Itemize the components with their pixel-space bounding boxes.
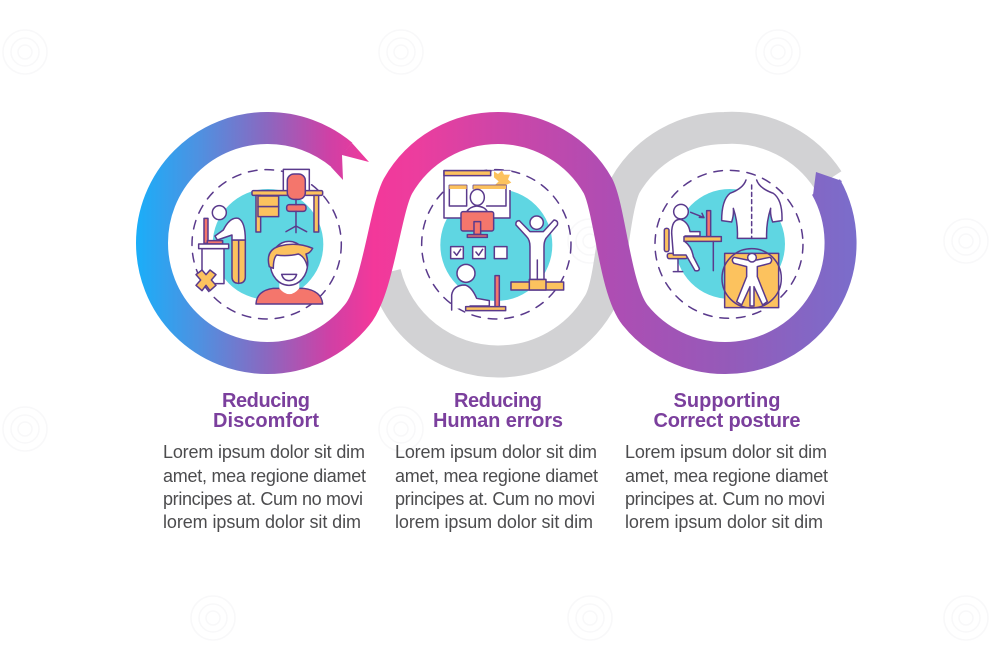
body text: lorem ipsum dolor sit dim [625, 512, 823, 532]
office desk and chair [252, 169, 323, 233]
grey ribbon behind the timeline [385, 128, 828, 362]
body text: amet, mea regione diamet [163, 466, 366, 486]
icon: correct posture [655, 170, 803, 318]
body text: Lorem ipsum dolor sit dim [163, 442, 365, 462]
checkboxes [451, 247, 507, 259]
back torso [722, 180, 782, 238]
teal blob [213, 189, 323, 300]
software window with gear [444, 171, 511, 218]
vitruvian man [722, 249, 781, 308]
body text: lorem ipsum dolor sit dim [163, 512, 361, 532]
gradient ribbon with arrow ends [152, 128, 842, 358]
body text: lorem ipsum dolor sit dim [395, 512, 593, 532]
body text: principes at. Cum no movi [163, 489, 363, 509]
body text: amet, mea regione diamet [395, 466, 598, 486]
monitor [461, 212, 494, 237]
seated person at laptop [452, 264, 506, 311]
arrow tail [813, 172, 842, 199]
body text: Lorem ipsum dolor sit dim [625, 442, 827, 462]
heading: Correct posture [654, 410, 800, 432]
teal blob [440, 189, 552, 301]
icon: discomfort [192, 169, 341, 319]
heading: Reducing [454, 390, 542, 412]
dashed circle [422, 170, 571, 319]
heading: Discomfort [213, 410, 319, 432]
column 3: Supporting Correct posture [625, 390, 828, 532]
seated upright person [664, 204, 721, 272]
body text: principes at. Cum no movi [625, 489, 825, 509]
body text: principes at. Cum no movi [395, 489, 595, 509]
body text: amet, mea regione diamet [625, 466, 828, 486]
dashed circle [192, 170, 341, 319]
dashed circle [655, 170, 803, 318]
smiling man [256, 241, 323, 304]
heading: Supporting [674, 390, 780, 412]
cheering person on platform [511, 216, 564, 290]
heading: Human errors [433, 410, 563, 432]
icon: human errors [422, 170, 571, 319]
body text: Lorem ipsum dolor sit dim [395, 442, 597, 462]
heading: Reducing [222, 390, 310, 412]
arrow head [331, 143, 369, 180]
teal blob [675, 189, 785, 299]
column 2: Reducing Human errors [395, 390, 598, 532]
slouching person at desk [196, 206, 245, 291]
column 1: Reducing Discomfort [163, 390, 366, 532]
